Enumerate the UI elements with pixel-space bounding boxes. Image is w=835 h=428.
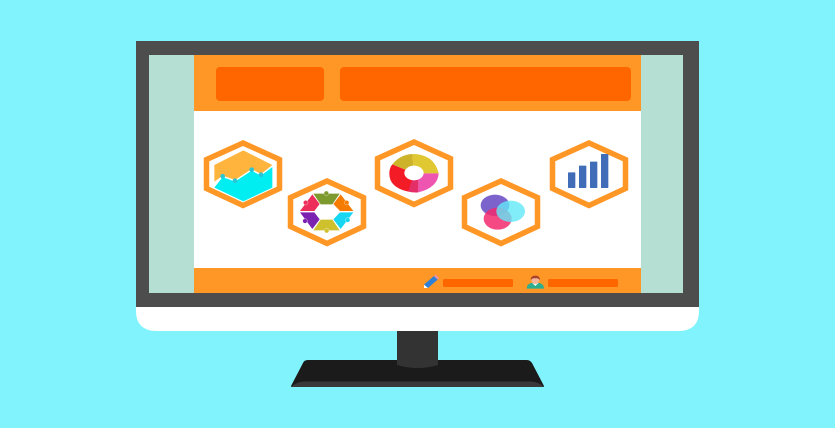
- hexagon: bar chart: [552, 143, 626, 206]
- hexagon: donut chart: [378, 142, 450, 204]
- header button large: [340, 67, 631, 101]
- venn circles: [481, 195, 525, 230]
- stand base: [291, 360, 544, 387]
- footer bar two: [548, 279, 618, 287]
- icon: pencil: [424, 275, 439, 288]
- page body: [194, 111, 641, 268]
- stand neck: [397, 331, 438, 368]
- segmented ring: [300, 191, 353, 233]
- monitor chin: [136, 307, 699, 331]
- left side panel: [149, 55, 194, 293]
- page header: [194, 55, 641, 111]
- icon: person: [527, 276, 544, 289]
- bar chart: [568, 154, 608, 188]
- hexagon: ring of people: [290, 181, 364, 244]
- stand base front edge: [291, 382, 544, 387]
- donut chart: [389, 154, 439, 193]
- monitor stand: [291, 331, 544, 387]
- right side panel: [641, 55, 683, 293]
- area chart: [214, 150, 272, 201]
- header button small: [216, 67, 324, 101]
- screen: [149, 55, 683, 293]
- footer bar one: [443, 279, 513, 287]
- monitor bezel: [136, 41, 699, 307]
- hexagon: area chart: [206, 143, 280, 206]
- page footer: [194, 268, 641, 293]
- hexagon: venn diagram: [464, 181, 538, 244]
